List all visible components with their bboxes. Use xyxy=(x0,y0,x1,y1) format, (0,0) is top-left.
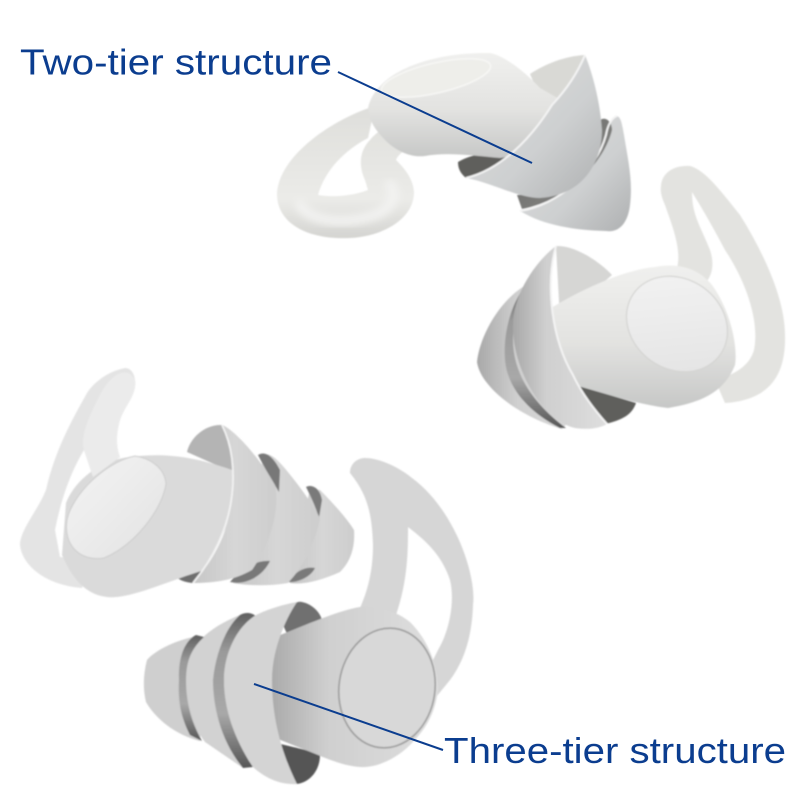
front flange xyxy=(466,55,602,198)
loop highlight xyxy=(300,185,394,221)
ear hook xyxy=(350,458,473,702)
label: two-tier: Two-tier structure xyxy=(20,42,332,82)
front flange xyxy=(193,425,276,583)
ear hook xyxy=(20,368,135,588)
earplug: three-tier left xyxy=(20,368,354,597)
earplug: two-tier lower right xyxy=(477,166,785,429)
back flange inner xyxy=(530,55,585,116)
label: three-tier: Three-tier structure xyxy=(444,730,786,771)
rear flange inner xyxy=(282,602,322,640)
middle flange xyxy=(186,615,260,768)
flange rim xyxy=(193,425,233,583)
earplug: three-tier bottom xyxy=(144,458,473,784)
front flange back xyxy=(556,246,612,320)
earplug: two-tier top xyxy=(277,51,631,238)
tip rim xyxy=(520,116,617,211)
flange rim xyxy=(466,55,585,178)
gap crescent xyxy=(505,285,566,428)
middle flange xyxy=(233,454,320,585)
body xyxy=(368,53,570,158)
end cap xyxy=(608,257,746,391)
body xyxy=(268,607,438,767)
hook neck overlay xyxy=(83,373,135,477)
end cap xyxy=(66,456,166,559)
front flange xyxy=(224,602,297,784)
rear dark xyxy=(277,743,320,784)
body xyxy=(540,266,736,408)
tip flange xyxy=(477,285,590,429)
bottom dark xyxy=(575,385,636,424)
bottom dark xyxy=(172,557,208,583)
loop ear hook xyxy=(277,106,430,238)
rear flange dark xyxy=(187,425,232,472)
end cap xyxy=(331,622,443,754)
ear hook xyxy=(661,166,785,403)
body xyxy=(62,455,240,597)
tip flange xyxy=(144,636,205,741)
rear gap dark xyxy=(517,119,612,209)
tip gap xyxy=(179,635,204,741)
callout line: three-tier xyxy=(254,684,443,750)
middle gap xyxy=(213,613,257,768)
rear tip flange xyxy=(520,116,631,231)
end cap xyxy=(378,51,494,105)
flange rim xyxy=(551,246,607,424)
tip gap dark xyxy=(288,486,322,582)
callout line: two-tier xyxy=(338,72,532,163)
middle gap dark xyxy=(230,453,280,583)
front flange xyxy=(513,246,607,429)
tip flange xyxy=(290,488,354,583)
front flange dark xyxy=(458,150,515,178)
